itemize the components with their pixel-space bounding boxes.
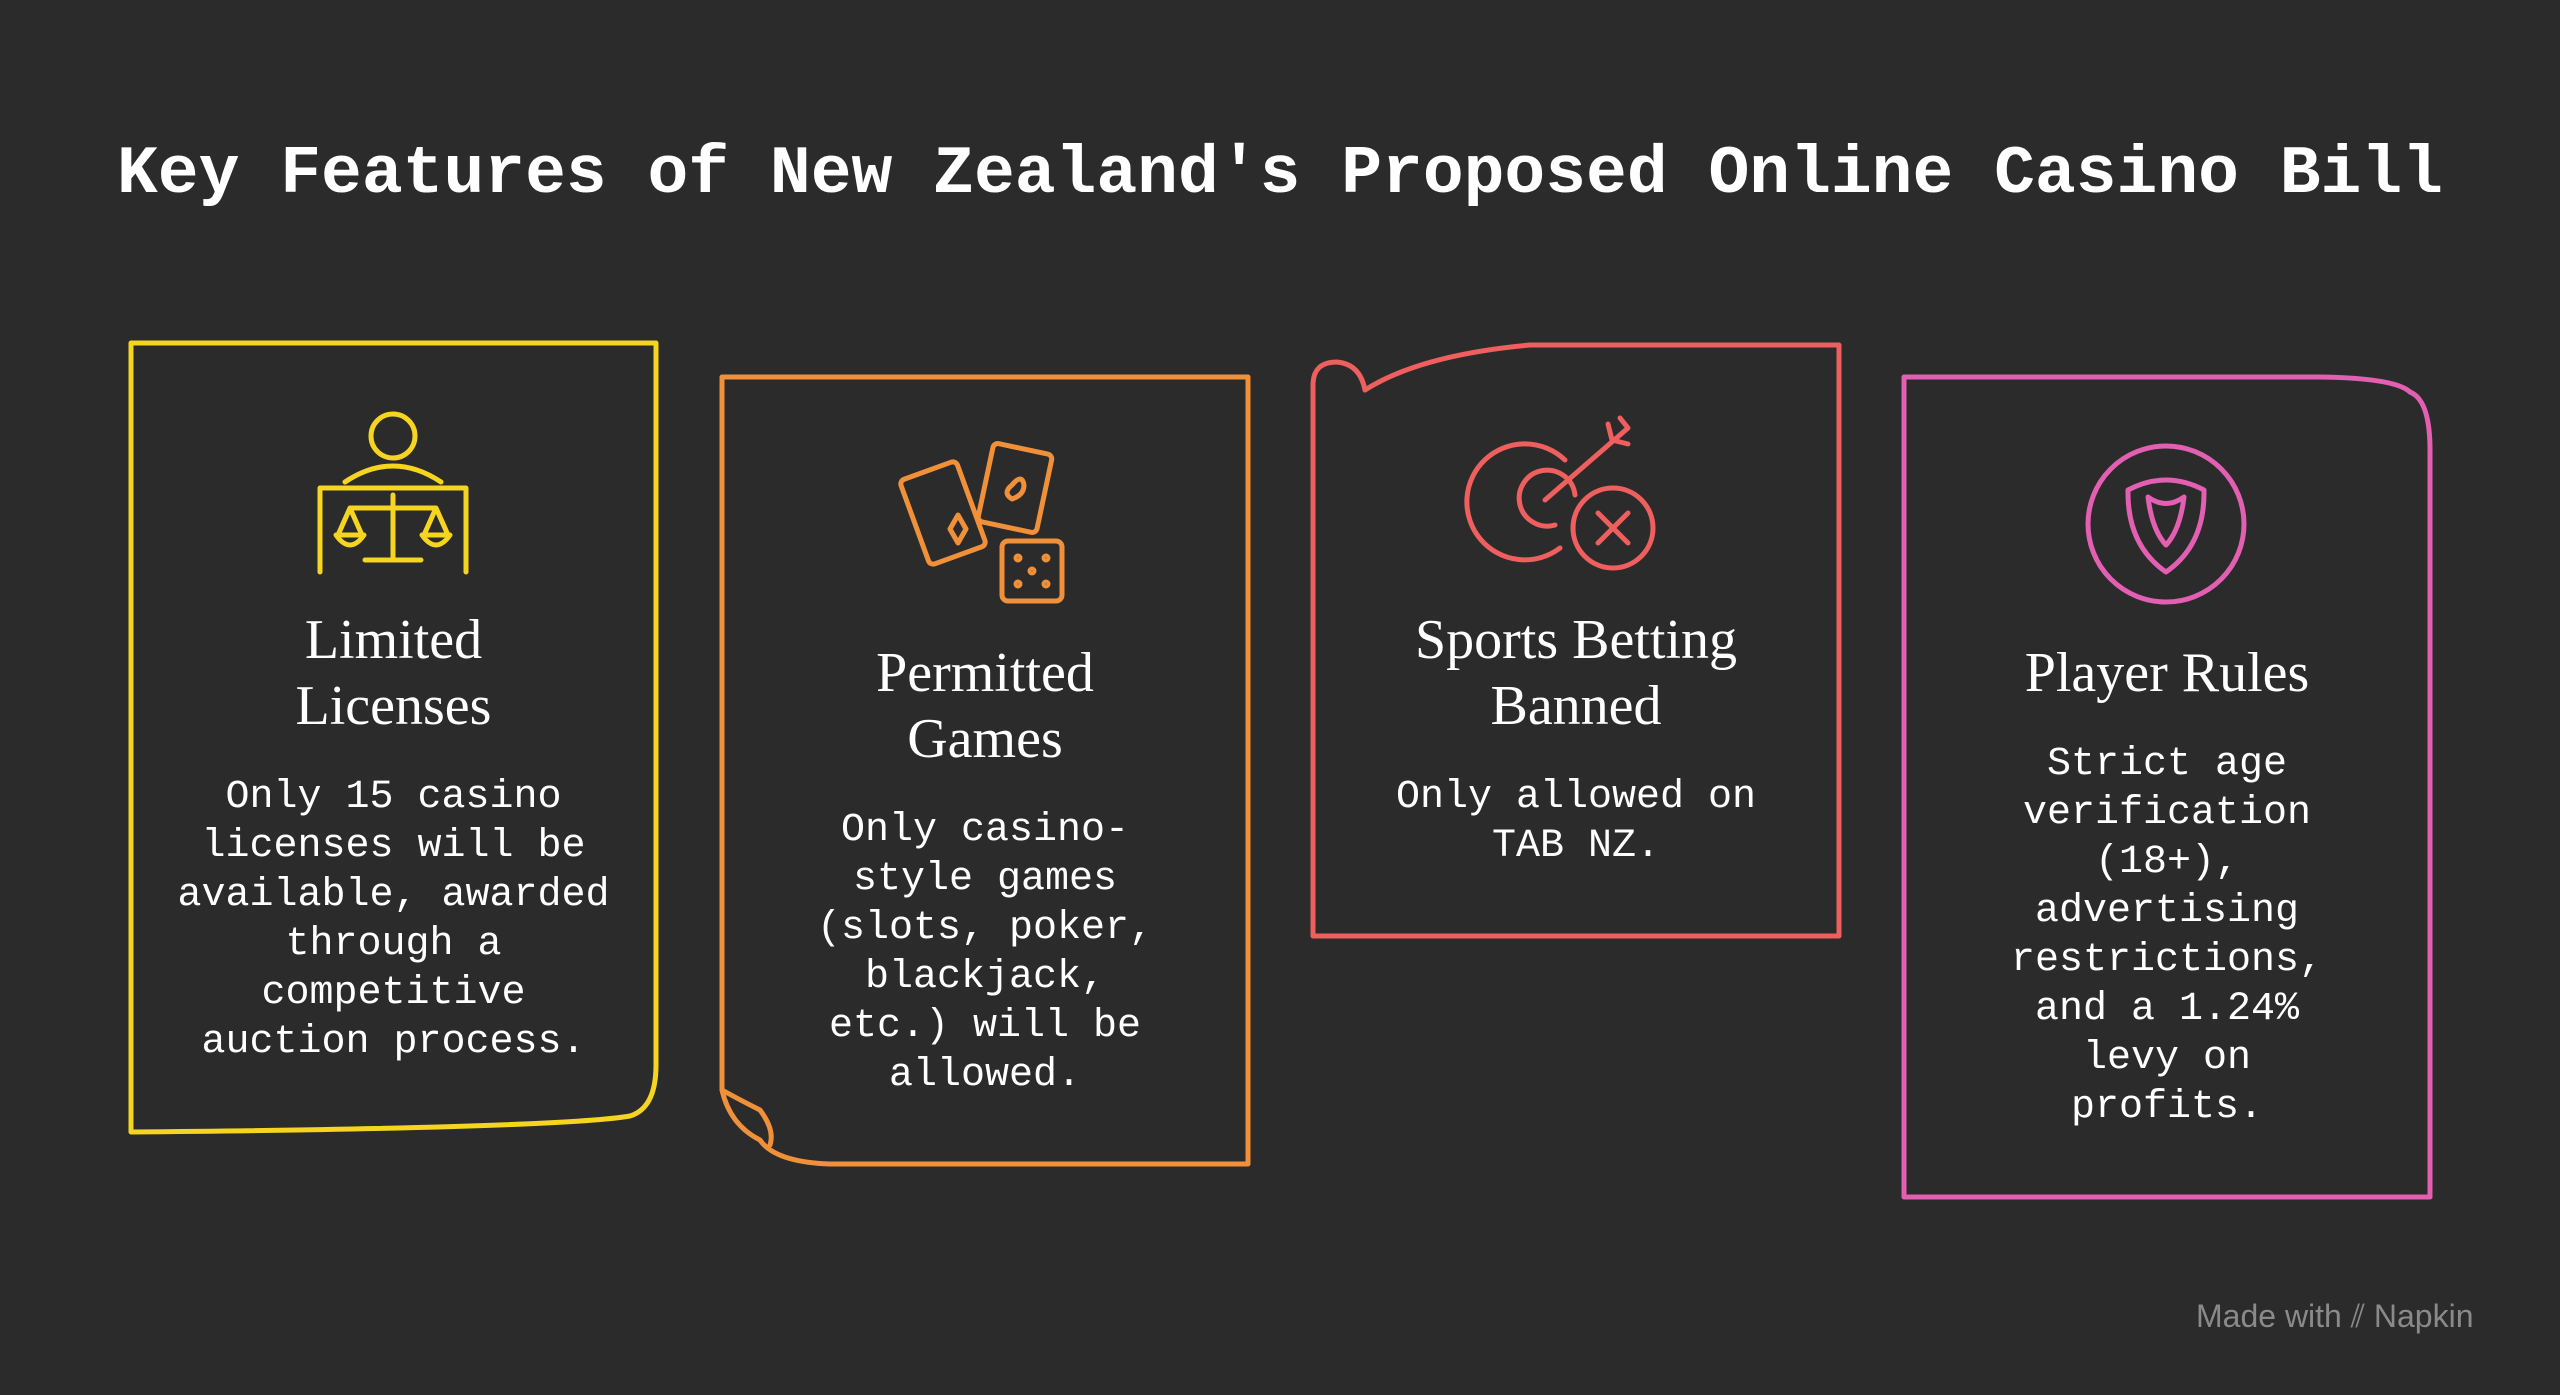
title: Key Features of New Zealand's Proposed Online Casino Bill <box>117 136 2443 213</box>
text: player rules: and a 1.24% <box>2035 987 2299 1032</box>
text: limited licenses: available, awarded <box>177 873 610 918</box>
icon: cards and dice <box>899 443 1062 601</box>
text: limited licenses <box>177 775 610 1065</box>
text: player rules: levy on <box>2083 1036 2251 1081</box>
text: permitted games: Only casino- <box>841 808 1129 853</box>
text: permitted games: style games <box>853 857 1117 902</box>
panel: sports betting frame <box>1313 345 1839 936</box>
text: limited licenses: competitive <box>261 971 526 1016</box>
panel: player rules frame <box>1904 377 2430 1197</box>
panel: permitted games frame <box>722 377 1248 1164</box>
heading: permitted games <box>876 642 1094 770</box>
text: limited licenses: licenses will be <box>201 824 586 869</box>
heading: sports betting banned: Banned <box>1490 675 1662 737</box>
text: player rules: advertising <box>2035 889 2299 934</box>
text: player rules: (18+), <box>2095 840 2239 885</box>
text: player rules: Strict age <box>2047 742 2287 787</box>
text: sports betting <box>1396 775 1756 869</box>
heading: limited licenses: Licenses <box>296 675 491 737</box>
text: permitted games: allowed. <box>889 1053 1081 1098</box>
icon: shield in circle <box>2088 446 2244 602</box>
text: sports betting: Only allowed on <box>1396 775 1756 820</box>
text: sports betting: TAB NZ. <box>1492 824 1660 869</box>
text: permitted games: etc.) will be <box>829 1004 1141 1049</box>
icon: target with cross <box>1467 418 1653 568</box>
text: player rules: restrictions, <box>2011 938 2323 983</box>
heading: player rules: Player Rules <box>2025 642 2309 704</box>
text: permitted games: (slots, poker, <box>817 906 1153 951</box>
heading: sports betting banned <box>1415 609 1737 737</box>
text: permitted games <box>817 808 1153 1098</box>
heading: sports betting banned: Sports Betting <box>1415 609 1737 671</box>
watermark: Made with ⫽ Napkin <box>2196 1298 2474 1334</box>
heading: permitted games: Games <box>907 708 1063 770</box>
heading: limited licenses: Limited <box>305 609 482 671</box>
text: player rules: verification <box>2023 791 2311 836</box>
text: limited licenses: Only 15 casino <box>225 775 562 820</box>
heading: permitted games: Permitted <box>876 642 1094 704</box>
text: player rules: profits. <box>2071 1085 2263 1130</box>
text: limited licenses: auction process. <box>201 1020 586 1065</box>
heading: limited licenses <box>296 609 491 737</box>
icon: licenses scales <box>320 414 466 572</box>
panel: limited licenses frame <box>131 343 656 1132</box>
text: player rules <box>2011 742 2323 1130</box>
text: permitted games: blackjack, <box>865 955 1105 1000</box>
text: limited licenses: through a <box>285 922 502 967</box>
